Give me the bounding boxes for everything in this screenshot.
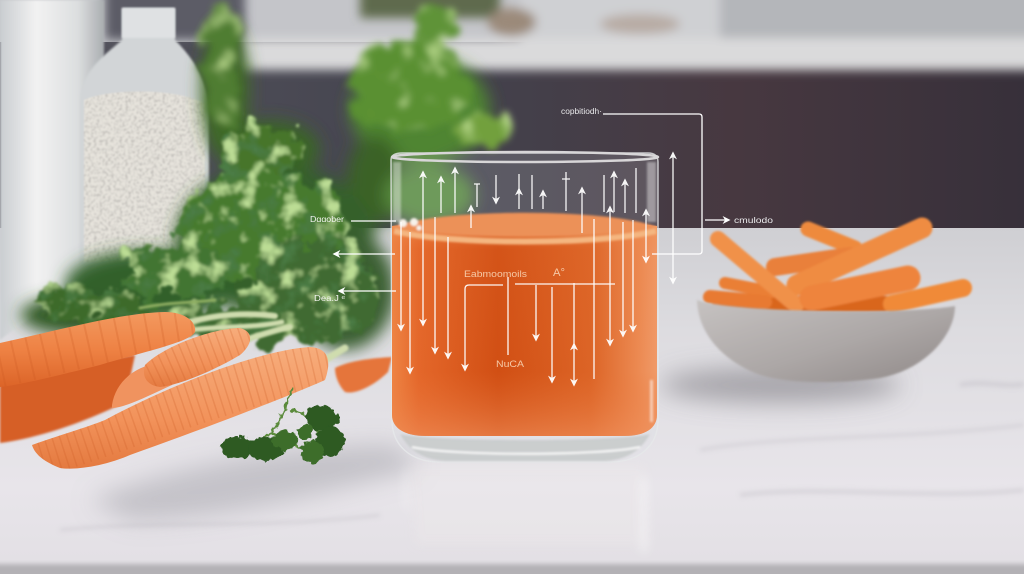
tall white bottle bbox=[0, 0, 104, 340]
carrot stems bbox=[140, 300, 345, 360]
inner bracket arrows bbox=[465, 277, 615, 385]
carrot: large front bbox=[32, 347, 330, 469]
glass base bbox=[400, 380, 653, 461]
label: right callout: cmulodo bbox=[734, 216, 774, 225]
glass wall highlights bbox=[393, 162, 656, 222]
vertical arrows over the glass bbox=[401, 153, 673, 379]
label: top callout: copbitiodh· bbox=[561, 107, 602, 116]
lower detailed leaves bbox=[27, 125, 380, 345]
carrot bunch bbox=[0, 300, 392, 469]
juice bbox=[392, 222, 657, 436]
parsley background greens bbox=[20, 3, 513, 350]
label: juice lower: NuCA bbox=[496, 359, 524, 369]
shadows on table bbox=[90, 367, 900, 520]
carrot: right tip bbox=[335, 357, 392, 393]
juice shading bbox=[392, 222, 657, 436]
white bottles bbox=[0, 0, 209, 340]
label: juice heading: Eabmoomoils bbox=[464, 269, 528, 279]
right callout connector bbox=[603, 114, 729, 254]
foam bbox=[392, 213, 657, 242]
label: vitamin A: A° bbox=[553, 267, 565, 279]
carrot sticks bbox=[710, 228, 963, 312]
glass reflection on table bbox=[404, 465, 650, 553]
bottle of grains bbox=[80, 8, 209, 265]
bowl of carrot sticks bbox=[697, 228, 963, 382]
upper blurred leaves bbox=[202, 3, 513, 146]
label: left upper callout: Dɑɑober bbox=[310, 215, 344, 224]
blurred leaf base bbox=[20, 20, 490, 350]
carrot: upper bbox=[0, 312, 195, 387]
background wall and shelf bbox=[0, 0, 1024, 240]
glass rim bbox=[392, 152, 658, 162]
left callout arrows bbox=[334, 221, 396, 291]
bowl body bbox=[697, 300, 955, 382]
parsley sprig bbox=[221, 388, 345, 463]
glass of carrot juice bbox=[391, 152, 658, 553]
carrot: small behind bbox=[112, 365, 172, 408]
carrot: lower back bbox=[0, 355, 135, 443]
marble table bbox=[0, 228, 1024, 574]
carrot: small front bbox=[144, 328, 250, 387]
label: left lower callout: Dea.J ᵉ bbox=[314, 294, 345, 303]
glass body bbox=[391, 153, 658, 462]
